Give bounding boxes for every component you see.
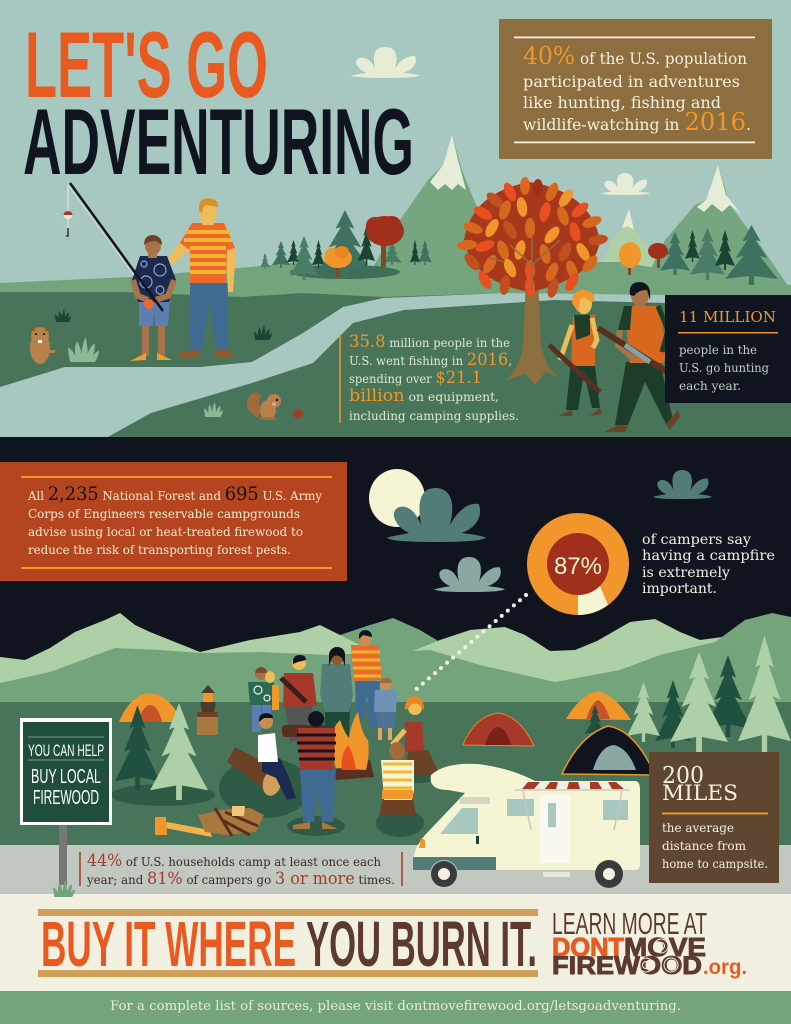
campfire stat text: having a campfire: [642, 548, 775, 564]
learn more logo: .org.: [703, 956, 747, 979]
trees mid right: [619, 225, 778, 285]
title: LET'S GO: [25, 12, 268, 117]
campfire stat text: important.: [642, 581, 717, 597]
camping households stat: 44% of U.S. households camp at least once each: [87, 851, 381, 871]
firewood advice box: [0, 462, 347, 581]
back group of campers: [248, 630, 424, 760]
population stat box: participated in adventures: [523, 73, 740, 91]
hunting stat box: [665, 295, 791, 403]
cloud light small: [434, 557, 505, 592]
ground shadows: [219, 758, 438, 837]
firewood sign: YOU CAN HELP: [28, 741, 104, 760]
dotted line to donut: [413, 595, 526, 692]
mountains night back: [300, 618, 480, 700]
mountains top: [360, 135, 791, 290]
learn more logo: MOVE: [624, 932, 706, 962]
fishing stat: 35.8 million people in the: [349, 332, 510, 352]
firewood advice box: advise using local or heat-treated firewood to: [28, 524, 303, 539]
mountains night light layer: [0, 613, 791, 710]
cloud dark small: [653, 470, 712, 499]
fishing stat: including camping supplies.: [349, 409, 519, 423]
learn more logo: FIREWOOD: [552, 952, 702, 980]
firewood sign: [20, 718, 112, 885]
woman in teal shirt: [320, 647, 353, 760]
cloud top: [351, 47, 420, 78]
lantern on stump: [197, 685, 218, 735]
camper in white shirt on log: [258, 713, 296, 800]
left tents and pines: [111, 693, 215, 806]
firewood advice box: reduce the risk of transporting forest pests.: [28, 542, 291, 557]
donut chart 87 percent: 87%: [554, 553, 602, 580]
hunter adult: [598, 282, 680, 432]
hunting stat box: people in the: [679, 343, 757, 357]
campfire stat text: is extremely: [642, 565, 730, 581]
distance stat box: home to campsite.: [662, 857, 768, 871]
camping households stat: [80, 851, 402, 889]
squirrel: [247, 392, 303, 420]
distance stat box: the average: [662, 821, 734, 835]
man in striped shirt: [351, 630, 382, 728]
distance stat box: [649, 752, 779, 883]
moon: [369, 469, 425, 527]
road: [0, 845, 791, 894]
donut chart 87 percent: [527, 513, 629, 615]
fishing stat: billion on equipment,: [349, 386, 499, 406]
firewood sign: FIREWOOD: [33, 787, 99, 809]
distance stat box: MILES: [662, 781, 738, 805]
campfire stat text: of campers say: [642, 532, 751, 548]
slogan band: [0, 894, 791, 991]
redhead child: [392, 696, 424, 752]
beaver: [30, 327, 55, 364]
hill back: [0, 262, 791, 340]
child in blue shirt: [374, 678, 397, 740]
hunting stat box: each year.: [679, 379, 741, 393]
trees mid left: [260, 210, 432, 280]
fishing stat: [340, 332, 519, 423]
footer bar: [0, 991, 791, 1024]
grass by sign: [53, 880, 75, 897]
cloud dark large: [387, 488, 486, 542]
campfire: [331, 712, 374, 780]
ground foreground: [0, 292, 791, 438]
fishing stat: spending over $21.1: [349, 368, 482, 388]
axe and firewood pile: [155, 806, 264, 837]
population stat box: like hunting, fishing and: [523, 94, 721, 112]
camping households stat: year; and 81% of campers go 3 or more times.: [86, 869, 395, 889]
mountains night front layer: [0, 613, 791, 720]
camper van: [413, 764, 640, 888]
big autumn tree: [457, 177, 609, 385]
population stat box: 40% of the U.S. population: [523, 42, 747, 70]
fisherman boy with rod: [64, 183, 176, 361]
camper in patterned shirt: [248, 667, 279, 732]
population stat box: wildlife-watching in 2016.: [523, 108, 751, 136]
right tents and pines: [463, 635, 791, 775]
campfire stat text: [642, 532, 775, 597]
awning: [515, 782, 630, 830]
distance stat box: 200: [662, 763, 704, 789]
fisherman father: [165, 198, 236, 358]
big log: [227, 747, 284, 798]
fishing stat: U.S. went fishing in 2016,: [349, 350, 512, 370]
slogan: YOU BURN IT.: [306, 908, 537, 980]
cloud right: [601, 173, 650, 195]
standing camper from behind: [293, 711, 338, 829]
footer sources: For a complete list of sources, please visit dontmovefirewood.org/letsgoadventuring.: [110, 999, 681, 1014]
firewood advice box: All 2,235 National Forest and 695 U.S. Army: [27, 483, 323, 505]
firewood advice box: Corps of Engineers reservable campgrounds: [28, 506, 300, 521]
night sky band: [0, 437, 791, 707]
slogan: BUY IT WHERE: [41, 908, 296, 980]
river: [0, 293, 666, 438]
title: ADVENTURING: [23, 89, 414, 194]
grass tufts: [55, 309, 272, 417]
firewood sign: BUY LOCAL: [31, 766, 101, 788]
population stat box: [499, 19, 772, 159]
hunting stat box: U.S. go hunting: [679, 361, 769, 375]
sky background: [0, 0, 791, 438]
campground ground: [0, 702, 791, 846]
learn more logo: DONT: [552, 932, 624, 962]
distance stat box: distance from: [662, 839, 747, 853]
child on stump from behind: [381, 742, 414, 800]
title: [23, 12, 414, 194]
stumps: [379, 750, 440, 816]
camper with guitar: [281, 655, 328, 742]
hunter child: [549, 290, 602, 416]
hunting stat box: 11 MILLION: [679, 308, 776, 326]
learn more logo: [552, 906, 747, 980]
